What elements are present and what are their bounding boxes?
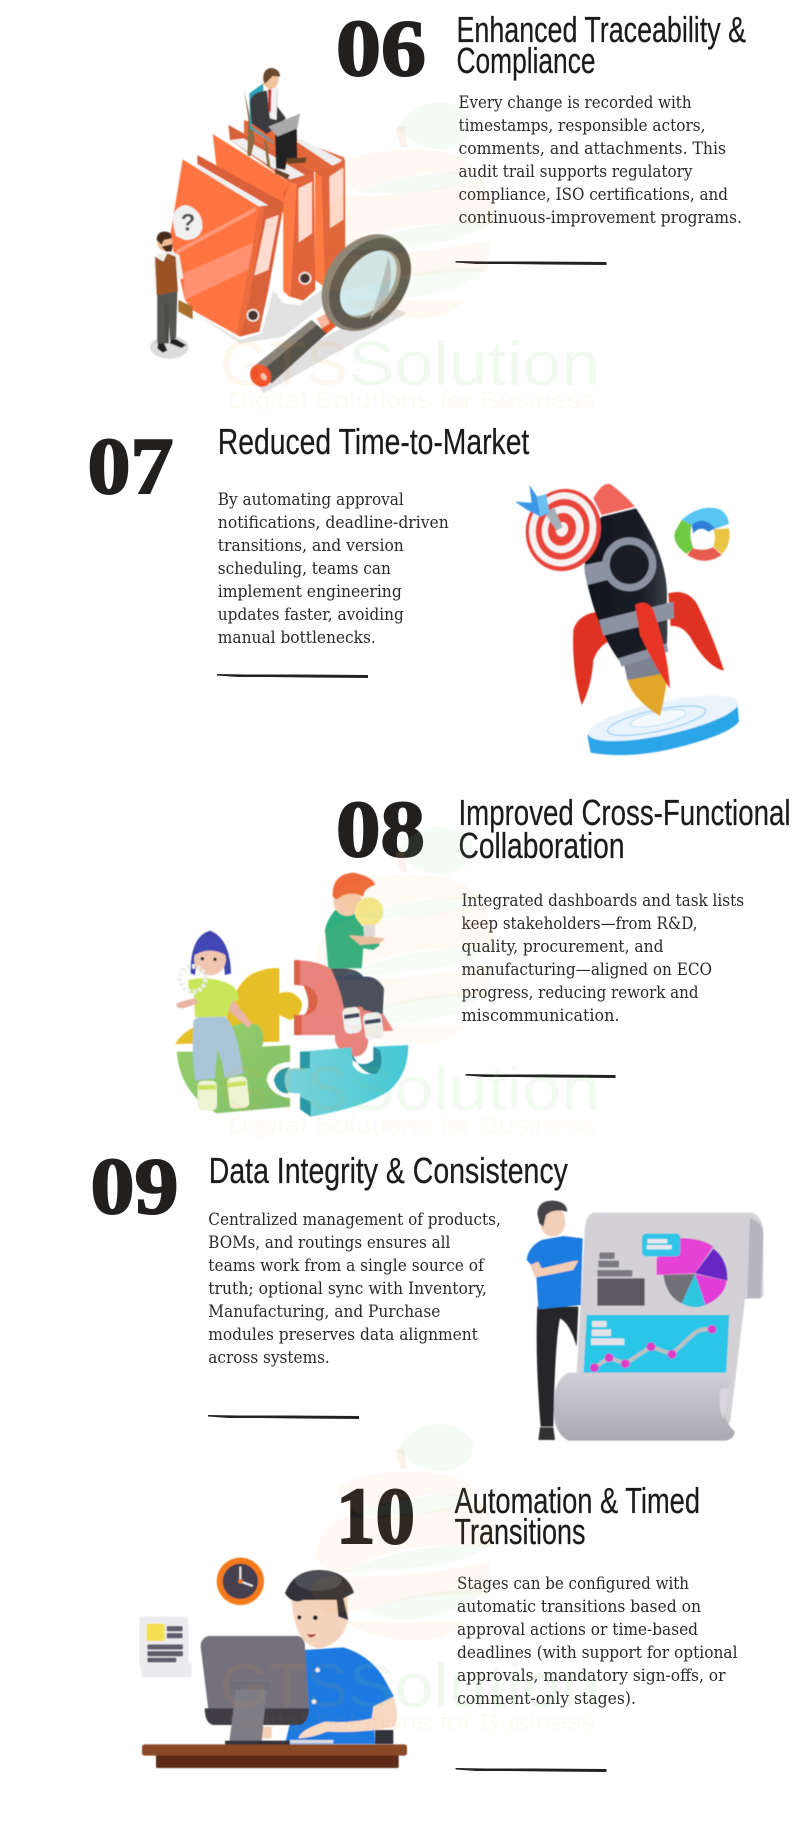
- body text 07: notifications, deadline-driven: [218, 513, 449, 532]
- panel: 09 data integrity: [90, 1141, 763, 1441]
- body text 07: implement engineering: [218, 582, 402, 601]
- cyan line panel: [583, 1315, 729, 1377]
- body text 09: BOMs, and routings ensures all: [208, 1233, 451, 1252]
- body text 08: miscommunication.: [462, 1006, 620, 1025]
- body text 06: Every change is recorded with: [458, 93, 692, 112]
- body text 06: audit trail supports regulatory: [458, 162, 693, 181]
- body text 10: deadlines (with support for optional: [457, 1643, 738, 1662]
- number 07: 07: [88, 421, 174, 511]
- illustration: man at computer with clock and note: [139, 1558, 407, 1768]
- watermark: GTS Solution top: Solution: [348, 330, 600, 399]
- man: [331, 968, 384, 1014]
- number 06: 06: [336, 3, 426, 93]
- number 09: 09: [90, 1141, 178, 1231]
- watermark: GTS Solution top: Digital Solutions for Business: [228, 387, 595, 413]
- man: [537, 1307, 578, 1427]
- heading 10: Transitions: [454, 1511, 586, 1552]
- illustration: rocket and target: [515, 480, 742, 755]
- body text 10: approvals, mandatory sign-offs, or: [457, 1666, 726, 1685]
- body text 10: Stages can be configured with: [457, 1574, 690, 1593]
- body text 06: continuous-improvement programs.: [458, 208, 742, 227]
- front folder: [170, 159, 259, 337]
- watermark: GTS Solution middle: Solution: [348, 1055, 600, 1124]
- body: [585, 508, 667, 661]
- back folder: [244, 120, 345, 175]
- magnifier: [317, 313, 337, 335]
- teal piece: [274, 1045, 408, 1117]
- body text 08: quality, procurement, and: [462, 937, 664, 956]
- platform: [587, 703, 739, 755]
- body text 08: [462, 891, 744, 1025]
- watermark: GTS Solution bottom: Solution: [348, 1652, 600, 1721]
- heading 10: Automation & Timed: [454, 1480, 700, 1521]
- panel: 10 automation: [139, 1471, 738, 1772]
- body text 08: Integrated dashboards and task lists: [462, 891, 744, 910]
- note: [139, 1617, 192, 1677]
- watermark: GTS Solution top: GTS: [220, 330, 348, 399]
- body text 09: teams work from a single source of: [208, 1256, 485, 1275]
- watermark: GTS Solution bottom: Digital Solutions for Business: [228, 1709, 595, 1735]
- heading 08: Collaboration: [458, 825, 624, 866]
- body text 07: updates faster, avoiding: [218, 605, 404, 624]
- illustration: puzzle pieces and two people: [175, 873, 408, 1117]
- body text 08: progress, reducing rework and: [462, 983, 698, 1002]
- watermark: GTS Solution middle: GTS: [220, 1055, 348, 1124]
- body text 06: compliance, ISO certifications, and: [458, 185, 728, 204]
- body text 07: scheduling, teams can: [218, 559, 391, 578]
- middle folder: [213, 134, 290, 217]
- heading 07: Reduced Time-to-Market: [218, 421, 529, 462]
- bottom roll: [553, 1373, 735, 1441]
- monitor: [201, 1636, 309, 1710]
- heading 10: [454, 1480, 700, 1552]
- pink piece: [294, 960, 393, 1057]
- fins back: [573, 612, 608, 705]
- target: [517, 480, 610, 580]
- number 08: 08: [336, 784, 425, 874]
- green piece: [177, 1023, 290, 1113]
- body text 06: [458, 93, 742, 227]
- body text 10: approval actions or time-based: [457, 1620, 698, 1639]
- illustration: folders, businessmen and magnifier: ?: [181, 210, 195, 237]
- heading 09: Data Integrity & Consistency: [209, 1150, 568, 1191]
- donut chart: [682, 508, 729, 529]
- pie chart: [663, 1274, 695, 1303]
- body text 07: [218, 490, 449, 647]
- heading 06: [456, 9, 746, 81]
- body text 07: transitions, and version: [218, 536, 404, 555]
- watermark: GTS Solution bottom: [220, 1424, 600, 1735]
- body text 07: By automating approval: [218, 490, 404, 509]
- yellow piece: [175, 968, 302, 1044]
- body text 09: across systems.: [208, 1348, 330, 1367]
- standing man: [157, 290, 170, 343]
- heading 08: [458, 792, 790, 866]
- question bubble: [173, 205, 202, 240]
- body text 08: manufacturing—aligned on ECO: [462, 960, 712, 979]
- body text 08: keep stakeholders—from R&D,: [462, 914, 698, 933]
- seated man: [244, 90, 255, 157]
- body text 09: modules preserves data alignment: [208, 1325, 478, 1344]
- number 10: 10: [336, 1471, 415, 1561]
- body text 10: [457, 1574, 738, 1708]
- body text 09: truth; optional sync with Inventory,: [208, 1279, 487, 1298]
- clock: [217, 1558, 264, 1605]
- body text 10: automatic transitions based on: [457, 1597, 702, 1616]
- person: [285, 1647, 394, 1744]
- body text 09: Centralized management of products,: [208, 1210, 501, 1229]
- body text 06: timestamps, responsible actors,: [458, 116, 706, 135]
- body text 07: manual bottlenecks.: [218, 628, 376, 647]
- illustration: folders, businessmen and magnifier: [150, 68, 429, 393]
- panel: 06 traceability: [150, 3, 746, 393]
- body text 06: comments, and attachments. This: [458, 139, 726, 158]
- scroll sheet: [577, 1213, 763, 1423]
- desk: [156, 1753, 399, 1768]
- panel: 08 collaboration: [175, 784, 790, 1117]
- watermark: GTS Solution bottom: GTS: [220, 1652, 348, 1721]
- watermark: GTS Solution top: [220, 102, 600, 413]
- body text 09: [208, 1210, 501, 1367]
- illustration: man presenting scroll chart: [527, 1201, 763, 1441]
- watermark: GTS Solution middle: [220, 827, 600, 1138]
- panel: 07 time-to-market: [88, 421, 742, 755]
- flame: [627, 665, 668, 716]
- body text 10: comment-only stages).: [457, 1689, 636, 1708]
- watermark: GTS Solution middle: Digital Solutions for Business: [228, 1112, 595, 1138]
- woman: [193, 1017, 243, 1081]
- dart: [545, 507, 563, 531]
- body text 09: Manufacturing, and Purchase: [208, 1302, 440, 1321]
- heading 06: Compliance: [456, 40, 596, 81]
